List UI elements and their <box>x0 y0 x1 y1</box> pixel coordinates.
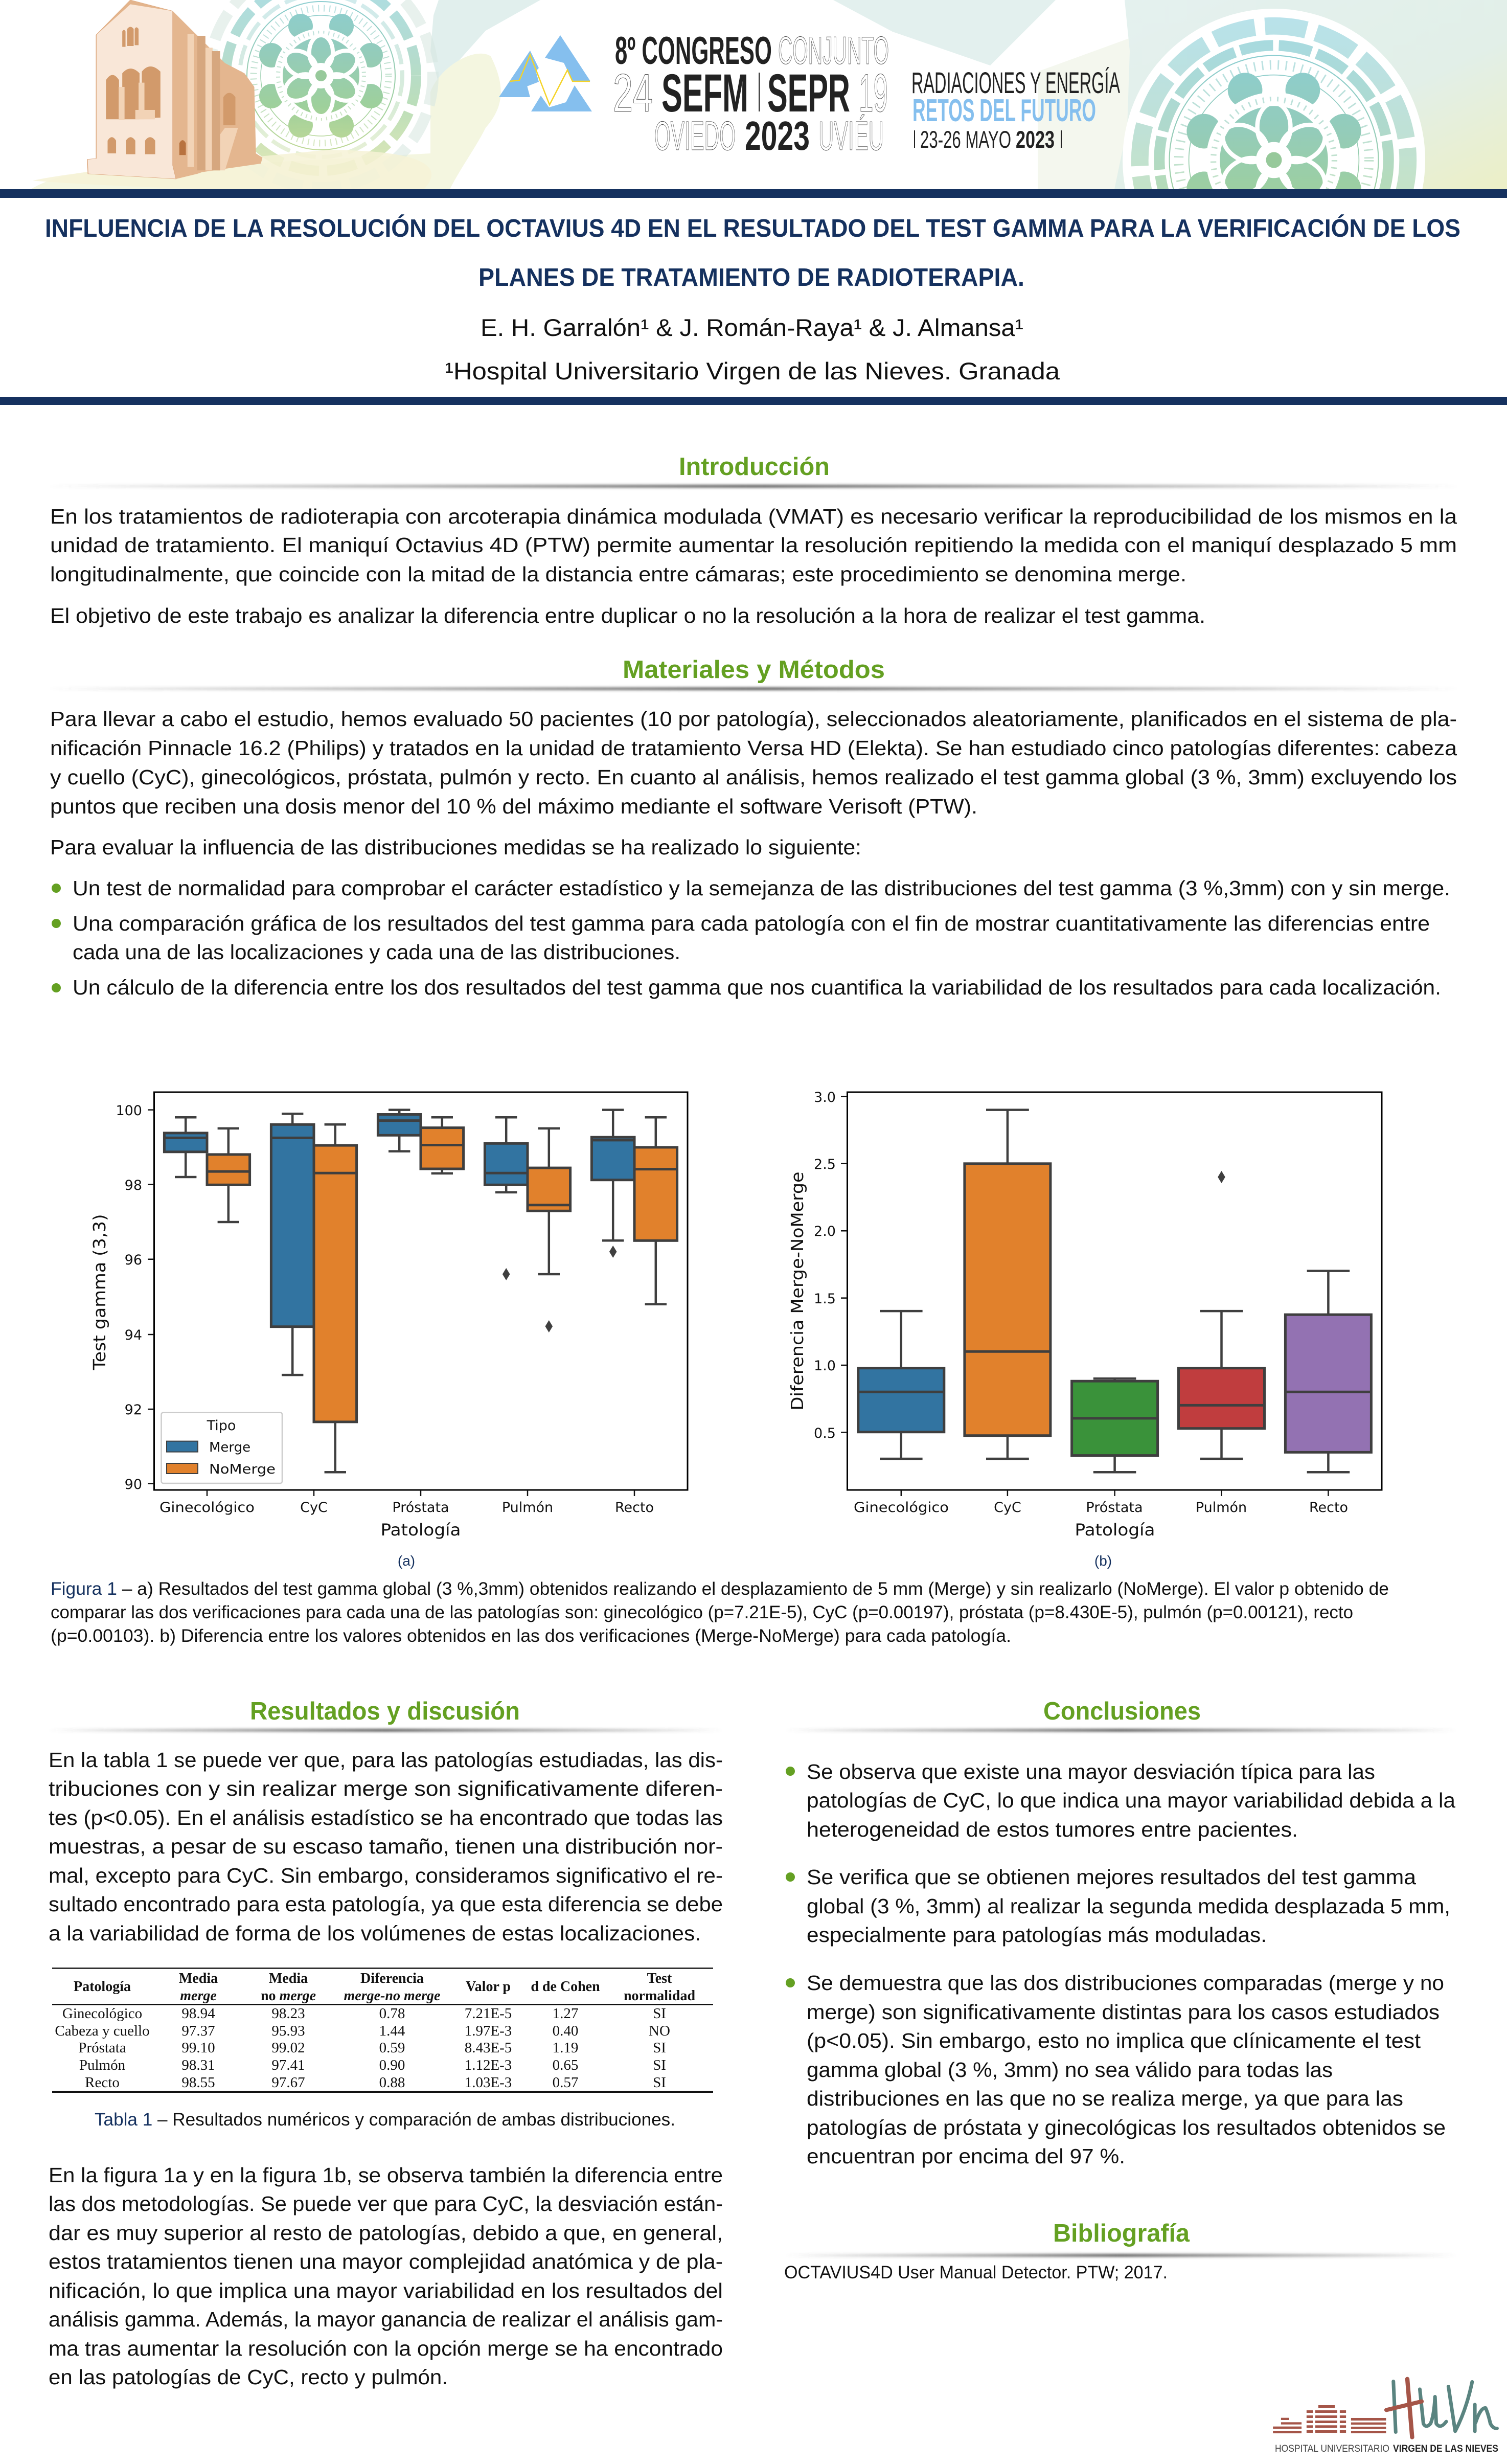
bullet list: materiales y métodos <box>52 876 1450 999</box>
x axis labels b: Próstata <box>1086 1500 1143 1516</box>
table rows: 0.59 <box>379 2040 405 2056</box>
figure caption: (p=0.00103). b) Diferencia entre los valores obtenidos en las dos verificaciones (Merge-NoMerge) para cada patología. <box>51 1626 1011 1646</box>
bullet list: materiales y métodos: Un test de normalidad para comprobar el carácter estadístico y la semejanza de las distribuciones del test gamma (3 %,3mm) con y sin merge. <box>73 876 1450 900</box>
congress logo text: OVIEDO <box>654 113 736 159</box>
text block: resultados 1: mal, excepto para CyC. Sin embargo, consideramos significativo el re- <box>49 1864 723 1887</box>
table: resultados numéricos <box>52 1968 713 2093</box>
congress logo text: UVIÉU <box>818 113 884 159</box>
axis frame a <box>154 1092 688 1490</box>
text block: resultados 1: a la variabilidad de forma de los volúmenes de estas localizaciones. <box>49 1922 701 1945</box>
chart: boxplot test gamma por patología (a) <box>89 1092 688 1569</box>
table header: normalidad <box>624 1988 695 2004</box>
table rows: SI <box>653 2005 666 2022</box>
congress logo text: SEFM <box>661 63 748 123</box>
box: Pulmón <box>1179 1171 1265 1459</box>
bullet list: conclusiones: distribuciones en las que no se realiza merge, ya que para las <box>807 2087 1403 2110</box>
text block: introducción: unidad de tratamiento. El maniquí Octavius 4D (PTW) permite aumentar la resolución repitiendo la medida con el maniquí desplazado 5 mm <box>50 533 1457 557</box>
y axis ticks and labels b: 3.0 <box>814 1090 836 1105</box>
x axis labels b: CyC <box>994 1500 1021 1516</box>
y axis ticks and labels a <box>116 1103 634 1496</box>
table rows: 1.44 <box>379 2023 405 2039</box>
table header: Media <box>269 1971 308 1986</box>
table rows: 95.93 <box>271 2023 305 2039</box>
header banner artwork <box>31 0 1507 189</box>
table rows: 1.19 <box>553 2040 578 2056</box>
legend: Tipo <box>207 1418 236 1434</box>
table caption: Tabla 1 – Resultados numéricos y comparación de ambas distribuciones. <box>95 2110 675 2130</box>
text block: resultados 2: ma tras aumentar la resolución con la opción merge se ha encontrado <box>49 2337 723 2360</box>
table rows: 0.78 <box>379 2005 405 2022</box>
congress slogan: 2023 <box>1016 126 1055 153</box>
table rows: 0.88 <box>379 2074 405 2091</box>
text block: resultados 1: tes (p<0.05). En el análisis estadístico se ha encontrado que todas las <box>49 1806 723 1829</box>
boxes: Próstata <box>378 1110 464 1173</box>
table rows: SI <box>653 2074 666 2091</box>
table rows: 1.27 <box>553 2005 578 2022</box>
bullet list: conclusiones: especialmente para patologías más moduladas. <box>807 1923 1267 1947</box>
bullet list: conclusiones: encuentran por encima del 97 %. <box>807 2144 1125 2168</box>
table rows: SI <box>653 2057 666 2073</box>
bullet list: conclusiones: heterogeneidad de estos tumores entre pacientes. <box>807 1818 1298 1841</box>
x axis labels b <box>854 1500 1348 1540</box>
y axis ticks and labels b <box>814 1090 1328 1496</box>
table rows: 7.21E-5 <box>465 2005 512 2022</box>
y axis ticks and labels a: 98 <box>125 1178 142 1193</box>
y axis ticks and labels a: 92 <box>125 1402 142 1418</box>
x axis labels a: Patología <box>380 1520 461 1540</box>
bullet list: conclusiones: Se demuestra que las dos distribuciones comparadas (merge y no <box>807 1971 1444 1995</box>
bullet list: conclusiones <box>786 1760 1455 2168</box>
table header: Diferencia <box>360 1971 424 1986</box>
bullet list: conclusiones: (p<0.05). Sin embargo, esto no implica que clínicamente el test <box>807 2029 1421 2052</box>
congress logo text <box>613 29 889 159</box>
bullet list: conclusiones: patologías de próstata y ginecológicas los resultados obtenidos se <box>807 2116 1446 2139</box>
x axis labels a: Recto <box>615 1500 654 1516</box>
top navy band <box>0 189 1507 198</box>
heading: Bibliografía: Bibliografía <box>1053 2220 1190 2247</box>
legend <box>162 1412 282 1483</box>
title <box>45 214 1460 291</box>
text block: introducción: En los tratamientos de radioterapia con arcoterapia dinámica modulada (VMAT) es necesario verificar la reproducibilidad de los mismos en la <box>50 505 1457 528</box>
figure caption: Figura 1 – a) Resultados del test gamma global (3 %,3mm) obtenidos realizando el desplazamiento de 5 mm (Merge) y sin realizarlo (NoMerge). El valor p obtenido de <box>51 1579 1389 1599</box>
congress slogan: RADIACIONES Y ENERGÍA <box>911 66 1120 100</box>
table rows: 1.12E-3 <box>465 2057 512 2073</box>
bullet list: materiales y métodos: Un cálculo de la diferencia entre los dos resultados del test gamma que nos cuantifica la variabilidad de los resultados para cada localización. <box>73 976 1441 999</box>
text block: resultados 1: tribuciones con y sin realizar merge son significativamente diferen- <box>49 1777 723 1800</box>
x axis labels b: Patología <box>1075 1520 1155 1540</box>
table header: d de Cohen <box>531 1979 600 1995</box>
table header: Test <box>647 1971 672 1986</box>
icon: left rose window <box>209 0 433 188</box>
x axis labels a: CyC <box>300 1500 328 1516</box>
table rows: 8.43E-5 <box>465 2040 512 2056</box>
bullet list: materiales y métodos: Una comparación gráfica de los resultados del test gamma para cada patología con el fin de mostrar cuantitativamente las diferencias entre <box>73 912 1430 935</box>
text block: resultados 1 <box>49 1748 723 1945</box>
congress logo text: SEPR <box>767 63 850 123</box>
chart: boxplot diferencia merge-nomerge (b) <box>787 1090 1382 1569</box>
table rows: 97.41 <box>271 2057 305 2073</box>
text block: resultados 2: análisis gamma. Además, la mayor ganancia de realizar el análisis gam- <box>49 2308 723 2331</box>
table rows: Próstata <box>78 2040 126 2056</box>
congress logo text: 24 <box>613 63 653 123</box>
table header: merge <box>180 1988 217 2004</box>
text block: resultados 1: muestras, a pesar de su escaso tamaño, tienen una distribución nor- <box>49 1835 723 1858</box>
table rows <box>55 2005 670 2091</box>
table rows: 99.02 <box>271 2040 305 2056</box>
icon: hospital logo <box>1273 2379 1498 2454</box>
y axis title a: Test gamma (3,3) <box>89 1214 109 1371</box>
title: PLANES DE TRATAMIENTO DE RADIOTERAPIA. <box>478 264 1024 291</box>
icon: right rose window <box>1131 17 1417 189</box>
table header: Valor p <box>466 1979 511 1995</box>
congress logo text: 8º CONGRESO <box>615 29 772 73</box>
text block: resultados 2: estos tratamientos tienen una mayor complejidad anatómica y de pla- <box>49 2250 723 2273</box>
box: Ginecológico <box>858 1311 944 1459</box>
x axis labels a: Ginecológico <box>159 1500 255 1516</box>
box: Recto <box>1285 1271 1371 1472</box>
box: CyC <box>965 1110 1051 1459</box>
table rows: 0.57 <box>553 2074 578 2091</box>
x axis labels a: Pulmón <box>502 1500 553 1516</box>
y axis ticks and labels b: 1.0 <box>814 1358 836 1374</box>
bullet list: conclusiones: merge) son significativamente distintas para los casos estudiados <box>807 2000 1440 2024</box>
table rows: 98.55 <box>181 2074 215 2091</box>
table rows: NO <box>649 2023 670 2039</box>
heading: Introducción: Introducción <box>679 453 830 481</box>
table rows: 0.90 <box>379 2057 405 2073</box>
congress slogan: 23-26 MAYO <box>920 126 1011 153</box>
text block: materiales y métodos: nificación Pinnacle 16.2 (Philips) y tratados en la unidad de tratamiento Versa HD (Elekta). Se han estudiado cinco patologías diferentes: cabeza <box>50 736 1457 760</box>
x axis labels a <box>159 1500 654 1540</box>
text block: resultados 2: dar es muy superior al resto de patologías, debido a que, en general, <box>49 2221 723 2245</box>
congress slogan <box>911 66 1120 153</box>
table rows: Ginecológico <box>62 2005 142 2022</box>
table header: merge-no merge <box>344 1988 440 2004</box>
table header: Media <box>179 1971 218 1986</box>
table rows: Cabeza y cuello <box>55 2023 150 2039</box>
x axis labels b: Ginecológico <box>854 1500 949 1516</box>
table rows: 99.10 <box>181 2040 215 2056</box>
text block: introducción: longitudinalmente, que coincide con la mitad de la distancia entre cámaras; este procedimiento se denomina merge. <box>50 562 1186 586</box>
bullet list: conclusiones: global (3 %, 3mm) al realizar la segunda medida desplazada 5 mm, <box>807 1894 1450 1918</box>
table header: no merge <box>261 1988 316 2004</box>
x axis labels b: Recto <box>1309 1500 1348 1516</box>
text block: introducción: El objetivo de este trabajo es analizar la diferencia entre duplicar o no la resolución a la hora de realizar el test gamma. <box>50 604 1205 627</box>
text block: materiales y métodos: y cuello (CyC), ginecológicos, próstata, pulmón y recto. En cuanto al análisis, hemos realizado el test gamma global (3 %, 3mm) excluyendo los <box>50 765 1457 789</box>
text block: bibliografía: OCTAVIUS4D User Manual Detector. PTW; 2017. <box>784 2263 1168 2282</box>
text block: materiales y métodos: Para llevar a cabo el estudio, hemos evaluado 50 pacientes (10 por patología), seleccionados aleatoriamente, planificados en el sistema de pla- <box>50 707 1457 731</box>
bullet list: conclusiones: patologías de CyC, lo que indica una mayor variabilidad debida a la <box>807 1789 1455 1812</box>
y axis ticks and labels a: 94 <box>125 1327 142 1343</box>
text block: materiales y métodos: Para evaluar la influencia de las distribuciones medidas se ha realizado lo siguiente: <box>50 835 861 859</box>
text block: resultados 2: nificación, lo que implica una mayor variabilidad en los resultados del <box>49 2279 723 2302</box>
text block: resultados 2: las dos metodologías. Se puede ver que para CyC, la desviación están- <box>49 2192 723 2216</box>
icon: hospital logo: VIRGEN DE LAS NIEVES <box>1393 2444 1498 2454</box>
table rows: Recto <box>85 2074 120 2091</box>
table rows: 0.65 <box>553 2057 578 2073</box>
y axis ticks and labels a: 100 <box>116 1103 142 1119</box>
text block: resultados 1: En la tabla 1 se puede ver que, para las patologías estudiadas, las dis- <box>49 1748 723 1772</box>
authors: E. H. Garralón¹ & J. Román-Raya¹ & J. Almansa¹ <box>481 314 1023 341</box>
congress logo text: 2023 <box>745 113 810 159</box>
y axis ticks and labels b: 1.5 <box>814 1291 836 1307</box>
table rows: 98.23 <box>271 2005 305 2022</box>
congress logo text: 19 <box>859 63 888 123</box>
boxes: Pulmón <box>485 1117 570 1332</box>
legend: NoMerge <box>209 1462 276 1477</box>
table rows: 97.67 <box>271 2074 305 2091</box>
text block: resultados 1: sultado encontrado para esta patología, ya que esta diferencia se debe <box>49 1892 723 1916</box>
subfigure label b: (b) <box>1094 1553 1112 1569</box>
table rows: 0.40 <box>553 2023 578 2039</box>
boxes: CyC <box>271 1114 357 1472</box>
table rows: 97.37 <box>181 2023 215 2039</box>
y axis ticks and labels a: 96 <box>125 1252 142 1268</box>
x axis labels b: Pulmón <box>1196 1500 1247 1516</box>
box: Próstata <box>1072 1378 1158 1472</box>
table header <box>74 1971 695 2004</box>
boxes: Ginecológico <box>164 1117 250 1222</box>
table rows: 1.03E-3 <box>465 2074 512 2091</box>
affiliation: ¹Hospital Universitario Virgen de las Nieves. Granada <box>445 357 1060 385</box>
y axis title b: Diferencia Merge-NoMerge <box>787 1172 807 1410</box>
text block: materiales y métodos: puntos que reciben una dosis menor del 10 % del máximo mediante el software Verisoft (PTW). <box>50 795 977 818</box>
icon: hospital logo: HOSPITAL UNIVERSITARIO <box>1275 2444 1389 2454</box>
congress slogan: RETOS DEL FUTURO <box>912 93 1096 128</box>
legend: Merge <box>209 1440 250 1455</box>
title: INFLUENCIA DE LA RESOLUCIÓN DEL OCTAVIUS 4D EN EL RESULTADO DEL TEST GAMMA PARA LA VERIFICACIÓN DE LOS <box>45 214 1460 242</box>
bullet list: conclusiones: Se verifica que se obtienen mejores resultados del test gamma <box>807 1865 1416 1889</box>
text block: materiales y métodos <box>50 707 1457 859</box>
table header: Patología <box>74 1979 131 1995</box>
x axis labels a: Próstata <box>392 1500 449 1516</box>
boxes: Recto <box>591 1110 677 1304</box>
y axis ticks and labels b: 2.0 <box>814 1224 836 1239</box>
bullet list: materiales y métodos: cada una de las localizaciones y cada una de las distribuciones. <box>73 940 680 964</box>
subfigure label a: (a) <box>398 1553 415 1569</box>
y axis ticks and labels a: 90 <box>125 1477 142 1493</box>
congress logo text: CONJUNTO <box>778 29 889 73</box>
table rows: Pulmón <box>79 2057 126 2073</box>
heading: Conclusiones: Conclusiones <box>1043 1698 1201 1725</box>
axis frame b <box>848 1092 1382 1490</box>
text block: resultados 2: en las patologías de CyC, recto y pulmón. <box>49 2365 448 2389</box>
bullet list: conclusiones: Se observa que existe una mayor desviación típica para las <box>807 1760 1375 1783</box>
figure caption <box>51 1579 1389 1646</box>
table rows: SI <box>653 2040 666 2056</box>
text block: resultados 2: En la figura 1a y en la figura 1b, se observa también la diferencia entre <box>49 2163 723 2187</box>
heading: Resultados y discusión: Resultados y discusión <box>250 1698 520 1725</box>
y axis ticks and labels b: 2.5 <box>814 1157 836 1172</box>
bullet list: conclusiones: gamma global (3 %, 3mm) no sea válido para todas las <box>807 2058 1333 2082</box>
table rows: 1.97E-3 <box>465 2023 512 2039</box>
figure caption: comparar las dos verificaciones para cada una de las patologías son: ginecológico (p=7.21E-5), CyC (p=0.00197), próstata (p=8.430E-5), pulmón (p=0.00121), recto <box>51 1602 1353 1622</box>
y axis ticks and labels b: 0.5 <box>814 1426 836 1441</box>
heading: Materiales y Métodos: Materiales y Métodos <box>623 656 885 684</box>
text block: introducción <box>50 505 1457 627</box>
lower navy band <box>0 397 1507 405</box>
icon: church illustration <box>33 0 431 189</box>
icon: radiation trefoil logo <box>499 35 592 111</box>
text block: resultados 2 <box>49 2163 723 2389</box>
table rows: 98.94 <box>181 2005 215 2022</box>
table rows: 98.31 <box>181 2057 215 2073</box>
